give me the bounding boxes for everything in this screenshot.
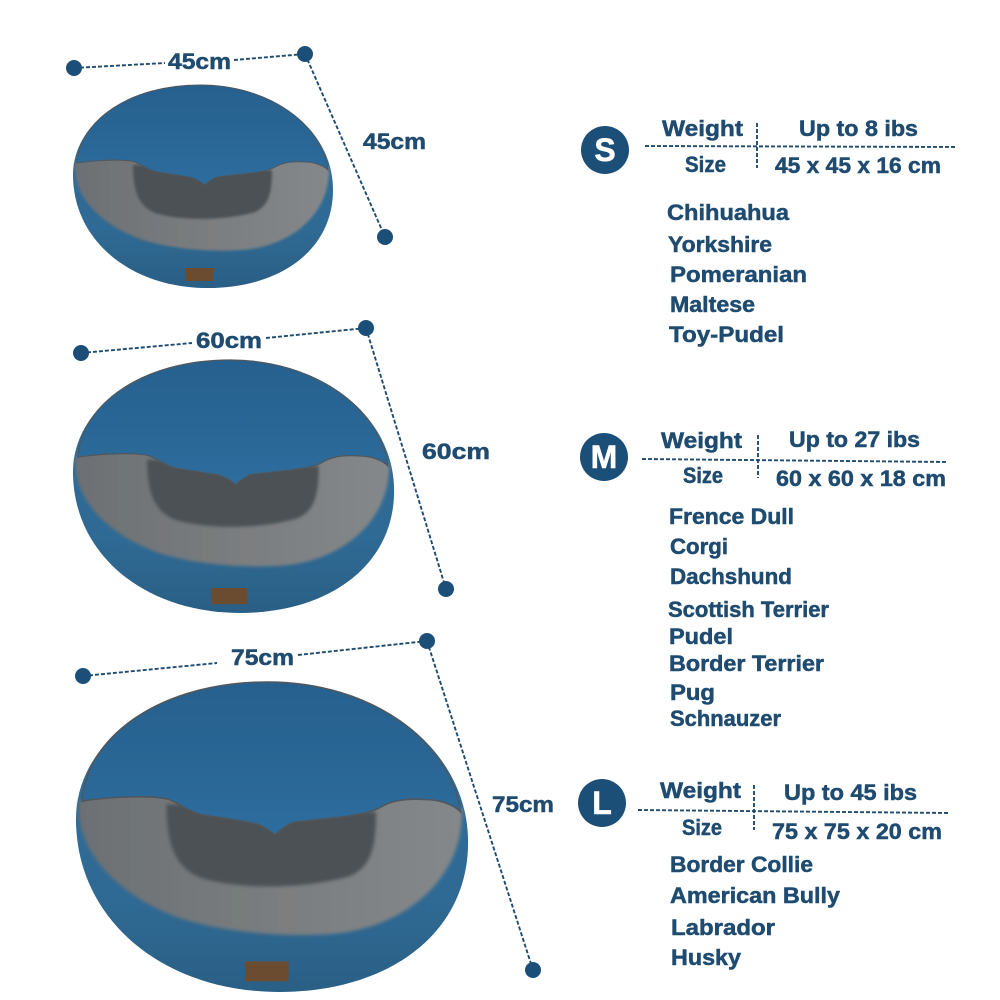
- dimension markers: large bed: 75cm: [492, 792, 554, 817]
- size S panel: Up to 8 ibs: [799, 116, 918, 141]
- dimension markers: medium bed: 60cm: [196, 328, 262, 353]
- dimension markers: large bed: 75cm: [231, 645, 294, 670]
- dimension markers: small bed: 45cm: [363, 129, 426, 154]
- size M panel: Up to 27 ibs: [789, 427, 920, 452]
- size L panel: [578, 778, 948, 970]
- size M panel: Pudel: [669, 624, 733, 649]
- size S panel: Size: [685, 152, 726, 177]
- size M panel: Weight: [661, 428, 743, 453]
- size L panel: Husky: [671, 945, 742, 970]
- medium bed photo: [73, 360, 394, 613]
- size M panel: Border Terrier: [669, 651, 824, 676]
- size S panel: Pomeranian: [670, 262, 807, 287]
- size S panel: Chihuahua: [667, 200, 790, 225]
- large bed photo: [76, 682, 468, 992]
- size M panel: Frence Dull: [669, 504, 794, 529]
- size M panel: [580, 427, 948, 731]
- size S panel: 45 x 45 x 16 cm: [775, 153, 941, 178]
- size L panel: Up to 45 ibs: [784, 780, 917, 805]
- size L panel: 75 x 75 x 20 cm: [772, 819, 942, 844]
- size M panel: Schnauzer: [670, 706, 781, 731]
- size S panel: Yorkshire: [668, 232, 772, 257]
- size S panel: Toy-Pudel: [669, 322, 784, 347]
- size M panel: Scottish Terrier: [668, 597, 829, 622]
- size M panel: Pug: [670, 680, 715, 705]
- small bed photo: [73, 85, 333, 288]
- size L panel: American Bully: [670, 883, 841, 908]
- size M panel: Size: [683, 463, 723, 488]
- size L panel: Border Collie: [670, 852, 813, 877]
- size S panel: Maltese: [670, 292, 755, 317]
- size S panel: S: [594, 132, 616, 168]
- dimension markers: medium bed: 60cm: [422, 439, 490, 464]
- size L panel: Weight: [660, 778, 742, 803]
- size M panel: Dachshund: [670, 564, 792, 589]
- dimension markers: small bed: [66, 46, 426, 245]
- dimension markers: small bed: 45cm: [168, 49, 231, 74]
- size S panel: [581, 116, 955, 347]
- size L panel: L: [592, 785, 612, 821]
- size S panel: Weight: [662, 116, 744, 141]
- size M panel: Corgi: [670, 534, 728, 559]
- dimension markers: large bed: [75, 633, 554, 978]
- size L panel: Labrador: [671, 915, 775, 940]
- size M panel: 60 x 60 x 18 cm: [776, 466, 946, 491]
- dimension markers: medium bed: [73, 320, 490, 597]
- size M panel: M: [591, 439, 617, 475]
- size L panel: Size: [682, 815, 722, 840]
